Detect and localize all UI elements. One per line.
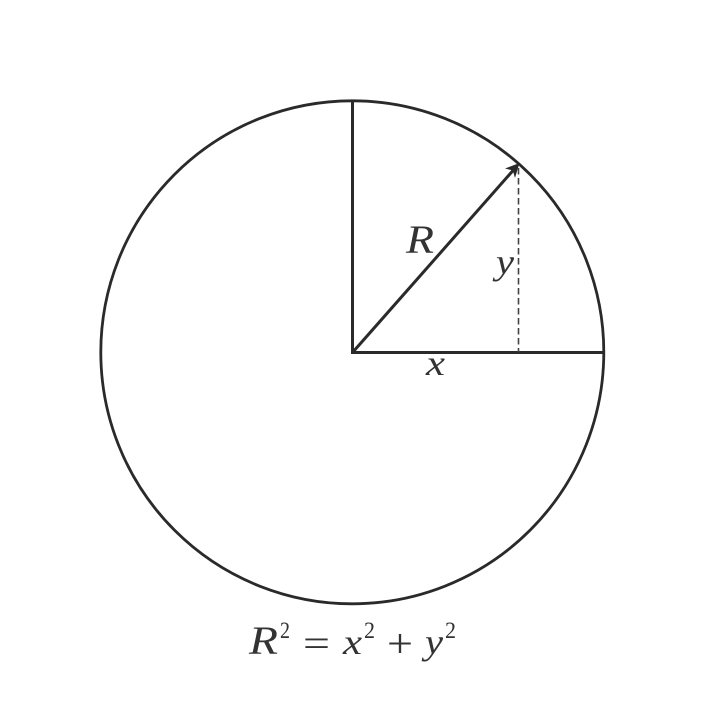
label x: x [425,343,445,383]
dashed y line [518,168,520,352]
equation: R [248,618,278,663]
equation [248,618,456,666]
label y: y [493,242,514,282]
equation: = [303,623,330,665]
equation: y [422,622,443,662]
radius arrow R [352,163,520,352]
horizontal x line [351,351,604,354]
equation: 2 [280,618,290,643]
circle outline [101,101,604,604]
equation: x [342,622,362,662]
equation: 2 [445,618,456,643]
equation: + [387,621,413,666]
equation: 2 [364,618,375,643]
label R: R [405,217,434,262]
vertical radius line [351,101,354,354]
